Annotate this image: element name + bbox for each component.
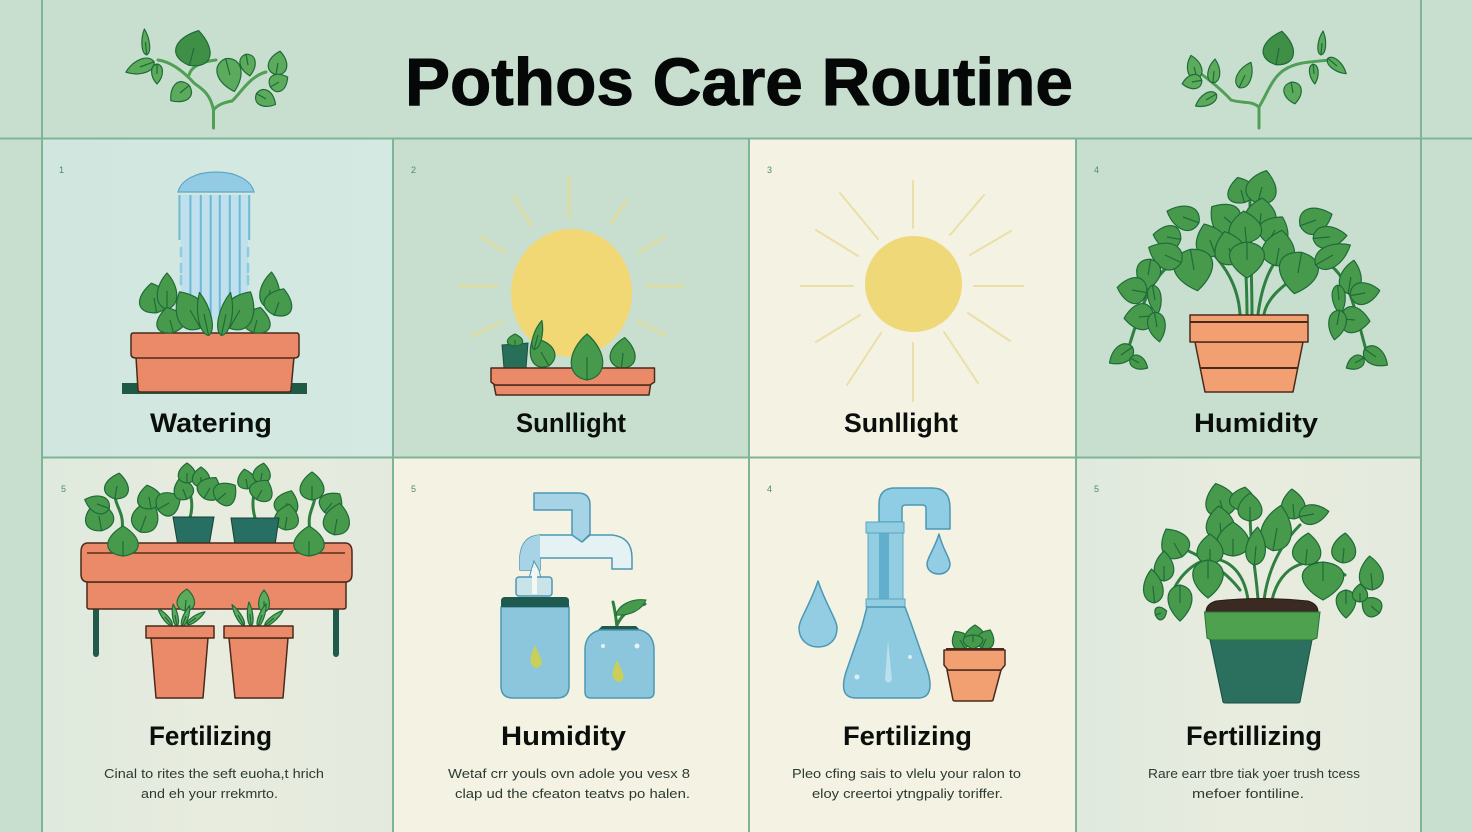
panel: header bbox=[123, 26, 1349, 128]
panel: 5 fertilizing bbox=[42, 457, 393, 832]
description: eloy creertoi ytngpaliy toriffer. bbox=[812, 786, 1003, 801]
description: Wetaf crr youls ovn adole you vesx 8 bbox=[448, 766, 690, 781]
label: Fertillizing bbox=[1186, 721, 1322, 751]
title: Pothos Care Routine bbox=[405, 45, 1073, 120]
step number 4: 4 bbox=[1094, 165, 1099, 175]
description bbox=[792, 766, 1021, 801]
step number 5: 5 bbox=[1094, 484, 1099, 494]
panel: 7 fertilizing bbox=[749, 457, 1076, 832]
step number 5: 5 bbox=[411, 484, 416, 494]
icon: sun over tray bbox=[460, 177, 683, 395]
step number 4: 4 bbox=[767, 484, 772, 494]
description bbox=[448, 766, 690, 801]
icon: faucet and fertilizer bottles bbox=[501, 493, 654, 698]
description: Rare earr tbre tiak yoer trush tcess bbox=[1148, 766, 1361, 781]
panel: 3 sunlight bbox=[749, 138, 1076, 457]
icon: sun with rays bbox=[801, 181, 1023, 401]
label: Watering bbox=[150, 408, 272, 438]
description bbox=[1148, 766, 1361, 801]
description: mefoer fontiline. bbox=[1192, 786, 1304, 801]
panel: 2 sunlight bbox=[393, 138, 749, 457]
step number 1: 1 bbox=[59, 165, 64, 175]
label: Sunllight bbox=[516, 408, 626, 438]
panel: 1 watering bbox=[42, 138, 393, 457]
description: and eh your rrekmrto. bbox=[141, 786, 278, 801]
icon: watering pot with shower bbox=[122, 172, 307, 394]
panel: 8 fertilizing bbox=[1076, 457, 1421, 832]
icon: planter shelf with potted plants bbox=[81, 462, 353, 698]
description: clap ud the cfeaton teatvs po halen. bbox=[455, 786, 690, 801]
description bbox=[104, 766, 324, 801]
icon: left pothos sprig bbox=[123, 26, 292, 128]
label: Sunllight bbox=[844, 408, 958, 438]
icon: pothos in green pot bbox=[1142, 480, 1386, 703]
description: Cinal to rites the seft euoha,t hrich bbox=[104, 766, 324, 781]
panel: 6 humidity bbox=[393, 457, 749, 832]
step number 2: 2 bbox=[411, 165, 416, 175]
description: Pleo cfing sais to vlelu your ralon to bbox=[792, 766, 1021, 781]
label: Humidity bbox=[501, 721, 626, 751]
icon: trailing pothos in terracotta pot bbox=[1105, 167, 1392, 392]
icon: right pothos sprig bbox=[1181, 29, 1349, 128]
label: Fertilizing bbox=[149, 721, 272, 751]
label: Fertilizing bbox=[843, 721, 972, 751]
icon: tap, flask, droplets and small pot bbox=[799, 488, 1005, 701]
panel: 4 humidity bbox=[1076, 138, 1421, 457]
step number 5: 5 bbox=[61, 484, 66, 494]
step number 3: 3 bbox=[767, 165, 772, 175]
label: Humidity bbox=[1194, 408, 1318, 438]
